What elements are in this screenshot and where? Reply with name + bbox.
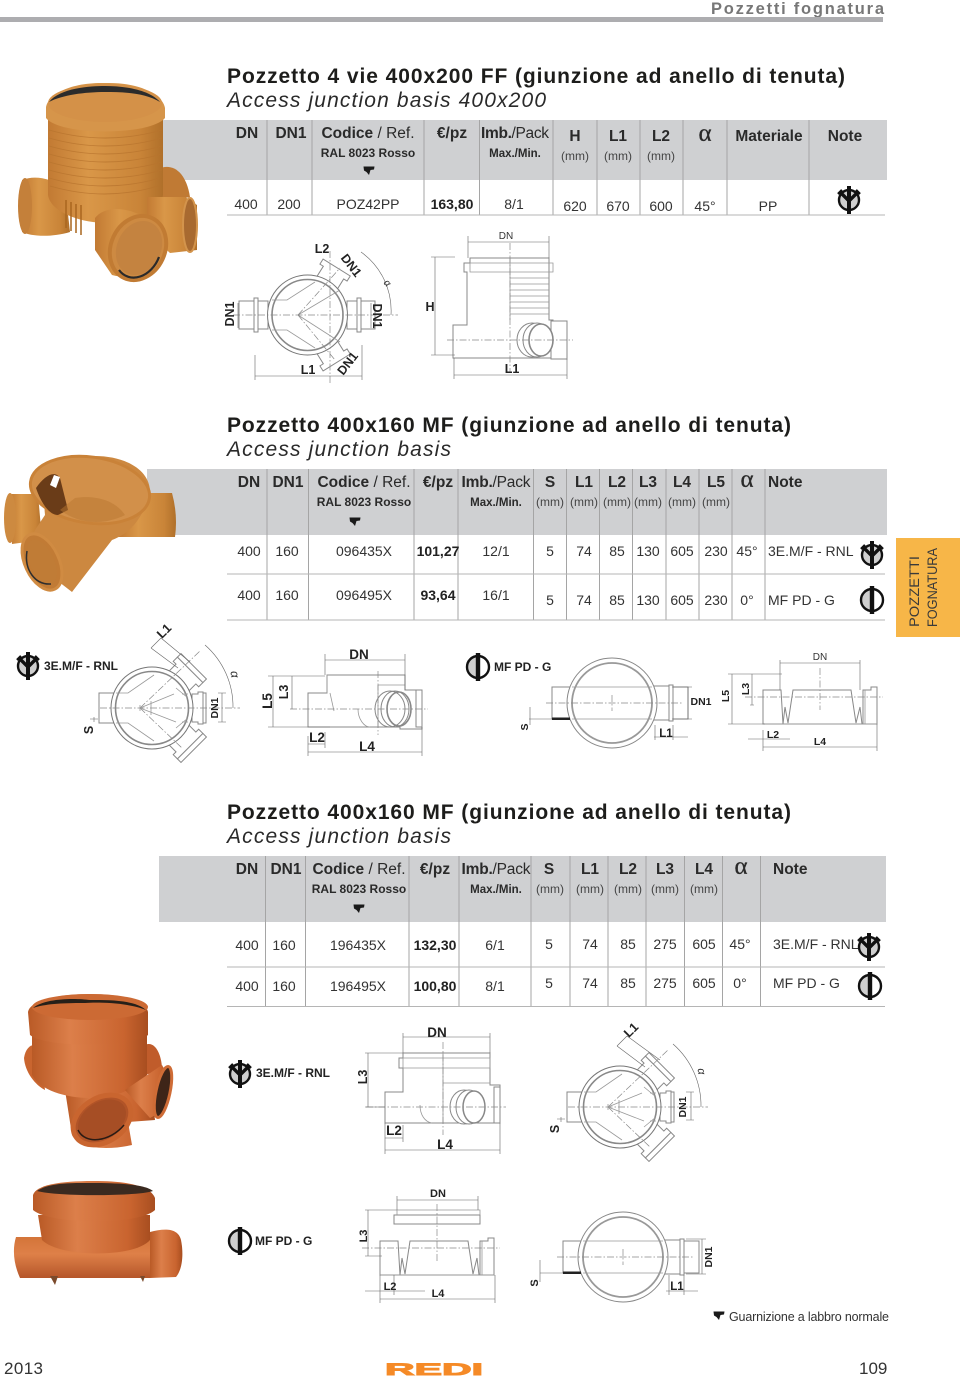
plan drawing: bottom straight: DN1 [703,1246,715,1268]
table 2: 101,27 [417,543,460,559]
table 2: DN [238,474,260,491]
page header: section title: Pozzetti fognatura [711,0,885,18]
table 3: 0° [733,975,747,991]
table 3: 74 [582,936,598,952]
table 1: 620 [563,198,587,214]
side drawing: MF PD - G: L2 [767,729,779,741]
technical drawing: plan view 4-way: L1 [301,363,315,377]
table 2: 85 [609,543,625,559]
plan drawing: bottom 3-way: L1 [621,1020,641,1040]
table 1: Codice / Ref. [321,125,415,142]
section 2 heading: Pozzetto 400x160 MF (giunzione ad anello di tenuta) [227,414,791,437]
table 2: (mm) [603,495,631,509]
side drawing: bottom straight: DN [430,1188,446,1200]
side drawing: MF PD - G: L5 [720,690,732,702]
legend and plan drawing: MF PD - G: L1 [659,728,673,740]
table 3: Note [773,861,808,878]
page header: section title [0,0,885,22]
table 3: 5 [545,975,553,991]
table 3: 74 [582,975,598,991]
plan drawing: bottom 3-way: S [548,1125,562,1133]
table 1: 600 [649,198,673,214]
section 2 heading [225,414,791,461]
table 1: POZ42PP [336,196,400,212]
table 3: (mm) [651,882,679,896]
table 3: 85 [620,975,636,991]
table 1: L2 [652,128,670,145]
side drawing: 3E.M/F - RNL: L5 [260,693,275,709]
section 1 heading: Access junction basis 400x200 [225,89,546,112]
table 3: 605 [692,936,716,952]
table 1 [159,120,887,215]
table 3: (mm) [690,882,718,896]
plan drawing: bottom straight: L1 [670,1281,684,1293]
table 3: L1 [581,861,599,878]
table 2: (mm) [570,495,598,509]
table 3: 275 [653,936,677,952]
side drawing: 3E.M/F - RNL: L4 [359,739,375,754]
table 2: L5 [707,474,725,491]
table 1: 200 [277,196,301,212]
photo: red straight pozzetto [14,1181,182,1285]
table 2: 74 [576,592,592,608]
side drawing: bottom 3-way [356,1025,506,1154]
table 2: L2 [608,474,626,491]
table 2: 93,64 [420,587,456,603]
side tab: FOGNATURA [924,547,940,627]
table 1: L1 [609,128,627,145]
table 3: 3E.M/F - RNL [773,936,859,952]
side drawing: 3E.M/F - RNL: DN [349,647,369,662]
table 1: Max./Min. [489,148,541,160]
section 1 heading [225,65,845,112]
side drawing: MF PD - G: L4 [814,736,826,748]
table 2: (mm) [536,495,564,509]
photo: 4-way orange pozzetto [18,83,197,289]
table 2: 16/1 [482,587,510,603]
table 2: €/pz [423,474,453,491]
table 2: 400 [237,543,261,559]
table 1: Materiale [735,128,803,145]
side drawing: 3E.M/F - RNL: L2 [309,730,325,745]
table 2: 3E.M/F - RNL [768,543,854,559]
legend and plan drawing: 3E.M/F - RNL: S [82,726,96,734]
side drawing: bottom straight [358,1188,500,1303]
legend: 3E.M/F - RNL [229,1060,330,1088]
table 1: α [698,120,712,147]
photo: red 3-way pozzetto [24,994,175,1155]
technical drawing: plan view 4-way: DN1 [370,303,384,329]
table 2: 400 [237,587,261,603]
technical drawing: side view 4-way [425,231,573,379]
legend and plan drawing: 3E.M/F - RNL: α [227,670,243,680]
technical drawing: plan view 4-way [223,242,398,385]
table 1: DN [236,125,258,142]
table 1: Note [828,128,863,145]
table 1: 163,80 [431,196,474,212]
side drawing: MF PD - G: L3 [740,683,752,695]
table 3: L2 [619,861,637,878]
table 2: L1 [575,474,593,491]
table 3: (mm) [614,882,642,896]
table 3: (mm) [536,882,564,896]
table 2: 0° [740,592,754,608]
table 3: DN1 [270,861,302,878]
plan drawing: bottom straight [529,1212,715,1302]
technical drawing: side view 4-way: H [425,300,435,314]
table 3: 275 [653,975,677,991]
technical drawing: plan view 4-way: DN1 [338,251,364,280]
table 1: DN1 [275,125,307,142]
table 1: (mm) [647,149,675,163]
plan drawing: bottom 3-way [548,1020,708,1161]
table 3: 132,30 [414,937,457,953]
table 3: L4 [695,861,713,878]
table 1: H [569,128,581,145]
plan drawing: bottom straight: S [529,1279,541,1287]
table 2: DN1 [272,474,304,491]
table 3: 196495X [330,978,387,994]
table 3: 196435X [330,937,387,953]
side tab [896,538,960,637]
footnote: seal legend: Guarnizione a labbro normale [729,1310,889,1324]
table 2: Note [768,474,803,491]
table 3: 605 [692,975,716,991]
table 3: Codice / Ref. [312,861,406,878]
table 3: 100,80 [414,978,457,994]
table 3: 160 [272,978,296,994]
table 2: 230 [704,543,728,559]
table 1: Imb./Pack [481,125,549,142]
table 2 [147,466,887,620]
table 3: 400 [235,937,259,953]
table 2: 5 [546,543,554,559]
section 1 heading: Pozzetto 4 vie 400x200 FF (giunzione ad anello di tenuta) [227,65,845,88]
table 2: (mm) [702,495,730,509]
side drawing: bottom 3-way: L2 [386,1123,402,1138]
side tab: POZZETTI [906,556,922,627]
side drawing: bottom straight: L2 [384,1281,396,1293]
table 3: 45° [729,936,751,952]
table 1: €/pz [437,125,467,142]
table 2: L3 [639,474,657,491]
legend: MF PD - G: MF PD - G [255,1234,312,1248]
table 2: Codice / Ref. [317,474,411,491]
table 2: MF PD - G [768,592,835,608]
table 2: 5 [546,592,554,608]
technical drawing: plan view 4-way: L2 [315,242,329,256]
table 1: 400 [234,196,258,212]
section 3 heading: Access junction basis [225,825,452,848]
table 2: S [545,474,555,491]
table 3: RAL 8023 Rosso [312,882,406,896]
table 1: (mm) [561,149,589,163]
table 3: S [544,861,554,878]
table 2: 605 [670,543,694,559]
table 2: 096435X [336,543,393,559]
technical drawing: side view 4-way: L1 [505,362,519,376]
table 3: 8/1 [485,978,505,994]
table 3 [159,853,886,1006]
table 3: Imb./Pack [462,861,531,878]
table 3: 6/1 [485,937,505,953]
table 1: (mm) [604,149,632,163]
table 2: α [740,466,754,493]
table 2: 130 [636,543,660,559]
photo: open 3-way fitting [4,449,176,596]
table 3: €/pz [420,861,450,878]
side drawing: MF PD - G [720,652,883,751]
table 1: 45° [694,198,716,214]
table 1: 8/1 [504,196,524,212]
technical drawing: plan view 4-way: DN1 [335,349,361,378]
legend and plan drawing: MF PD - G: DN1 [690,696,712,708]
table 2: 12/1 [482,543,510,559]
table 2: 160 [275,587,299,603]
table 2: L4 [673,474,691,491]
table 1: 670 [606,198,630,214]
side drawing: 3E.M/F - RNL [260,647,428,756]
table 3: MF PD - G [773,975,840,991]
table 2: 605 [670,592,694,608]
side drawing: bottom 3-way: L4 [437,1137,453,1152]
table 2: 74 [576,543,592,559]
table 3: 160 [272,937,296,953]
side drawing: bottom 3-way: DN [427,1025,447,1040]
table 3: 400 [235,978,259,994]
table 2: (mm) [668,495,696,509]
table 3: 85 [620,936,636,952]
side drawing: bottom 3-way: L3 [356,1070,370,1084]
table 2: Imb./Pack [462,474,531,491]
legend and plan drawing: 3E.M/F - RNL [17,621,243,762]
table 2: 230 [704,592,728,608]
table 2: Max./Min. [470,497,522,509]
table 2: 130 [636,592,660,608]
table 2: 85 [609,592,625,608]
table 2: RAL 8023 Rosso [317,495,411,509]
section 3 heading [225,801,791,848]
side drawing: bottom straight: L4 [432,1288,445,1300]
side drawing: bottom straight: L3 [358,1230,370,1242]
section 2 heading: Access junction basis [225,438,452,461]
legend and plan drawing: 3E.M/F - RNL: DN1 [209,697,221,719]
legend: 3E.M/F - RNL: 3E.M/F - RNL [256,1066,330,1080]
legend and plan drawing: MF PD - G: S [519,723,531,731]
legend: MF PD - G [229,1227,312,1255]
table 3: α [734,853,748,880]
table 2: 096495X [336,587,393,603]
side drawing: MF PD - G: DN [813,652,827,663]
technical drawing: side view 4-way: DN [499,231,513,242]
table 2: (mm) [634,495,662,509]
side drawing: 3E.M/F - RNL: L3 [277,685,291,699]
table 3: (mm) [576,882,604,896]
table 3: Max./Min. [470,884,522,896]
legend and plan drawing: MF PD - G [467,653,712,748]
legend and plan drawing: MF PD - G: MF PD - G [494,660,551,674]
table 3: DN [236,861,258,878]
technical drawing: plan view 4-way: α [381,278,393,289]
table 3: L3 [656,861,674,878]
legend and plan drawing: 3E.M/F - RNL: L1 [154,621,174,641]
table 2: 45° [736,543,758,559]
table 2: 160 [275,543,299,559]
table 3: 5 [545,936,553,952]
section 3 heading: Pozzetto 400x160 MF (giunzione ad anello di tenuta) [227,801,791,824]
plan drawing: bottom 3-way: α [695,1067,708,1076]
table 1: RAL 8023 Rosso [321,146,415,160]
plan drawing: bottom 3-way: DN1 [677,1096,689,1118]
table 1: PP [759,198,777,214]
technical drawing: plan view 4-way: DN1 [223,301,237,327]
legend and plan drawing: 3E.M/F - RNL: 3E.M/F - RNL [44,659,118,673]
